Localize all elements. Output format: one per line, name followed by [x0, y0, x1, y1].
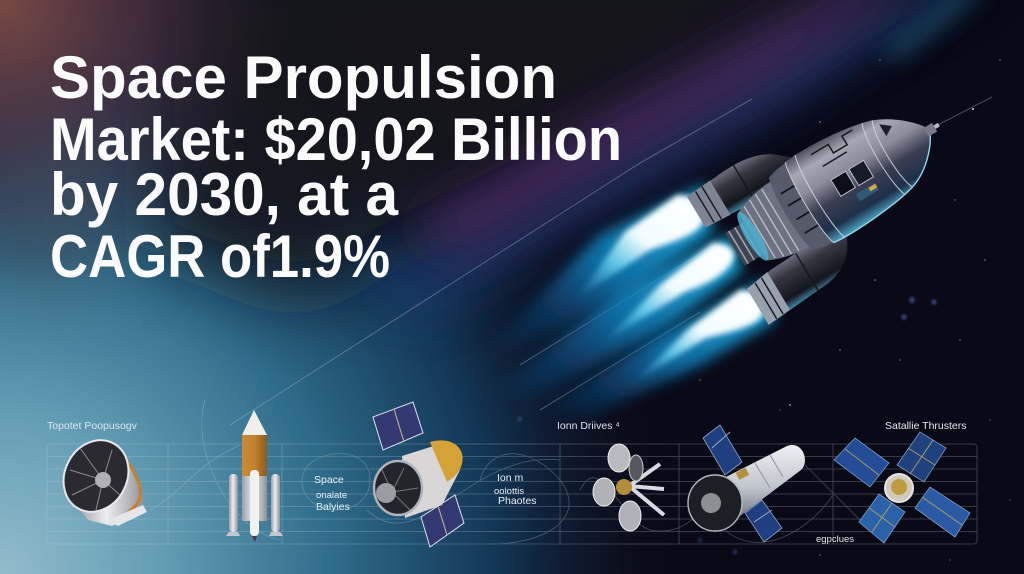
title: CAGR of1.9% [50, 223, 390, 290]
label: space: Balyies [316, 501, 350, 513]
icon: satellite with engine [373, 402, 464, 547]
label: bottom note: egpclues [816, 534, 854, 545]
label: ion middle: Phaotes [498, 495, 537, 507]
icon: engine [51, 429, 147, 526]
label: satellite thrusters: Satallie Thrusters [885, 420, 967, 432]
title: Space Propulsion [50, 44, 557, 111]
label: ion middle [494, 472, 537, 507]
exhaust plumes [490, 185, 775, 420]
label: ion middle: oolottis [494, 486, 524, 497]
title: Market: $20,02 Billion [50, 106, 622, 173]
timeline grid [47, 400, 977, 544]
upper booster [685, 134, 805, 231]
main body [781, 83, 964, 246]
body rim highlight [812, 136, 952, 244]
icon: launch rocket [226, 410, 283, 542]
icon: four-panel satellite [834, 432, 970, 543]
label: space [314, 474, 350, 513]
title [50, 44, 622, 290]
title: by 2030, at a [50, 161, 399, 228]
thin orbital lines [230, 97, 992, 425]
lower booster [744, 225, 866, 325]
starfield [518, 59, 1011, 561]
label: ion drives: Ionn Driives ⁴ [557, 420, 620, 432]
rocket [685, 63, 982, 327]
core engine [710, 162, 835, 287]
label: space: onalate [316, 490, 347, 501]
label: ion middle: Ion m [497, 472, 524, 484]
icon: ion drive petals [593, 444, 664, 531]
label: top-left: Topotet Poopusogv [47, 420, 138, 432]
label: space: Space [314, 474, 344, 486]
icon: cylinder satellite [688, 425, 805, 542]
nose tip [923, 120, 941, 137]
